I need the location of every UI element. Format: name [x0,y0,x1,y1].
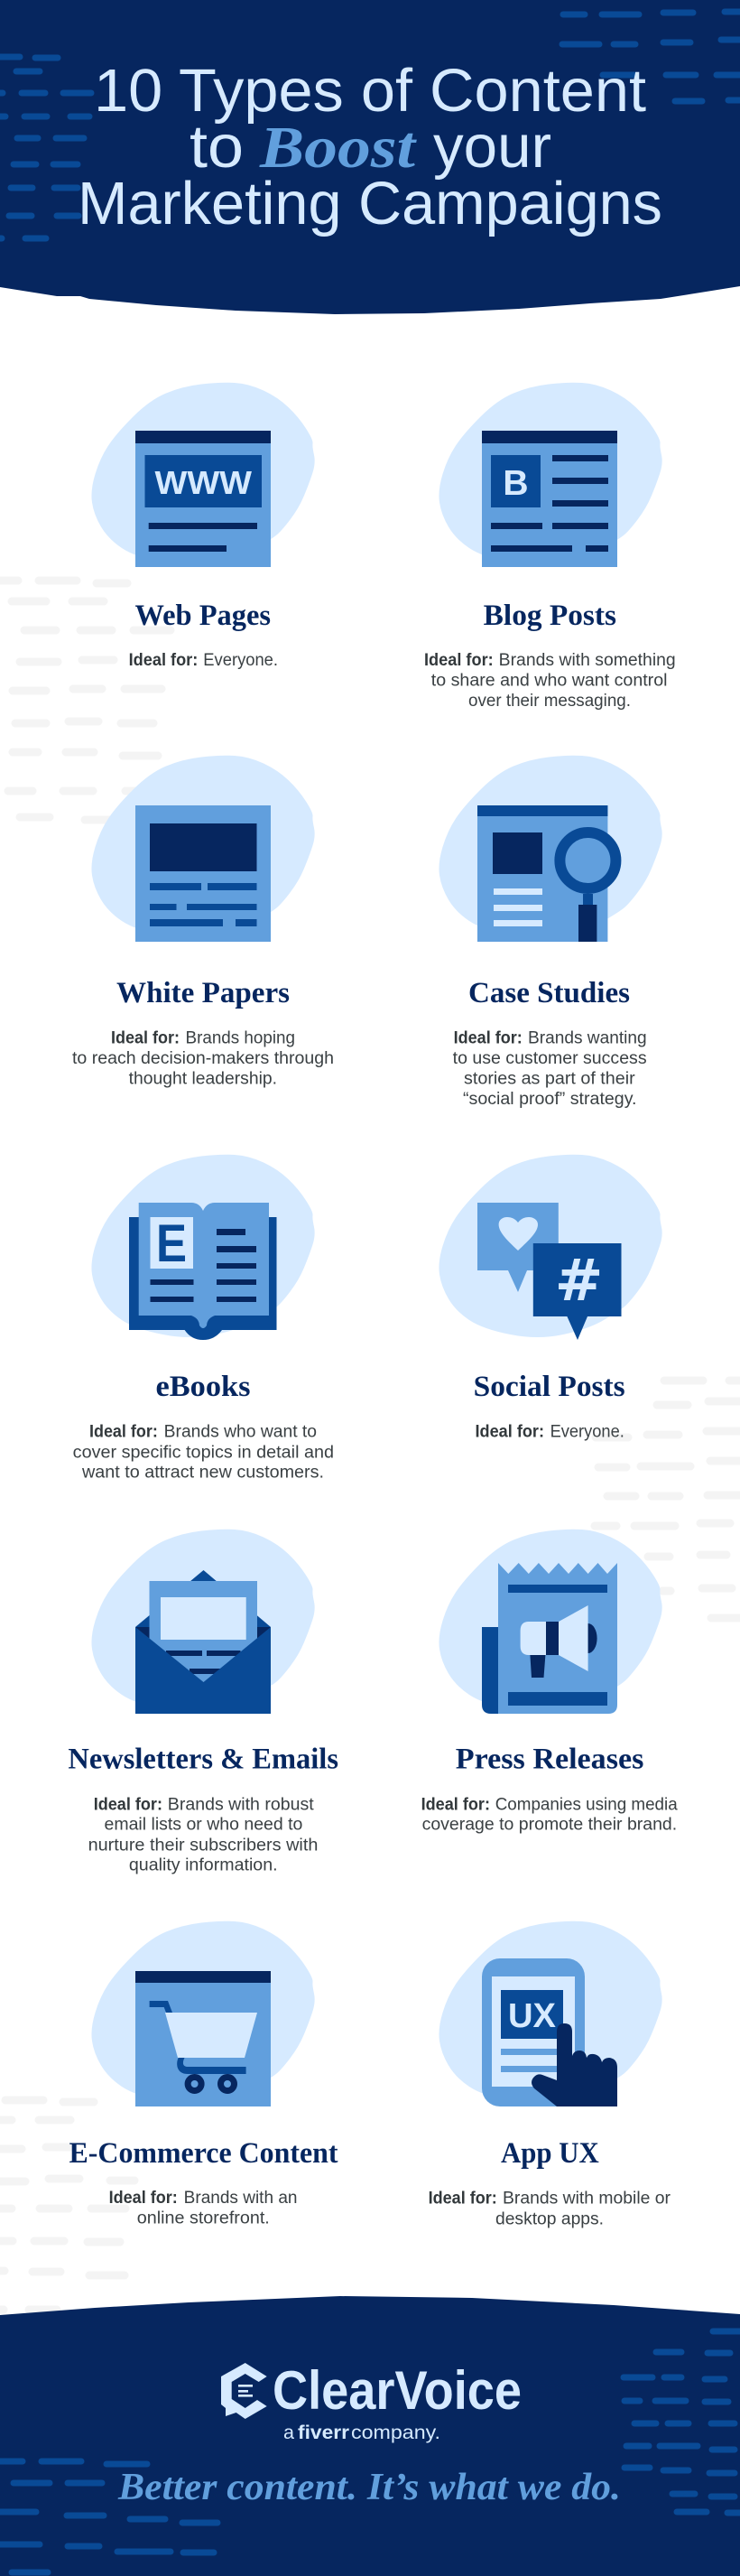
title: Boost [259,115,417,181]
heading: Web Pages [135,600,271,632]
icon: phone with pointing hand [482,1958,617,2106]
blob [91,1921,315,2104]
panel: blog posts [424,383,676,711]
icon: shopping cart [135,1971,271,2106]
title: 10 Types of Content [94,57,646,125]
icon: open book [129,1203,276,1340]
heading: E-Commerce Content [69,2137,338,2170]
description [453,1029,647,1109]
description: coverage to promote their brand. [422,1816,677,1835]
title: your [433,113,551,181]
blob [439,383,662,565]
description: want to attract new customers. [81,1464,324,1483]
description: Ideal for: [454,1029,523,1048]
tagline: Better content. It’s what we do. [117,2467,621,2508]
description: Ideal for: [421,1795,490,1814]
blob [439,756,662,938]
blob [91,756,315,938]
icon: magnifier over document [477,805,615,942]
description [73,1423,334,1483]
icon: press release with megaphone [482,1563,617,1714]
icon: ClearVoice logo mark [221,2363,267,2419]
heading: Case Studies [468,977,630,1009]
heading: Press Releases [456,1744,644,1776]
description: to reach decision-makers through [72,1049,334,1068]
icon: web page [135,431,271,567]
description: Ideal for: [424,651,494,670]
description: online storefront. [137,2209,270,2228]
panel: newsletters and emails [68,1530,338,1875]
description: Ideal for: [129,651,198,670]
description: “social proof” strategy. [463,1090,637,1109]
description: Brands with something [499,651,676,670]
description: Ideal for: [94,1795,162,1814]
title: to [190,113,244,181]
icon: blog post [482,431,617,567]
icon: phone with pointing hand: UX [508,1997,557,2035]
description: over their messaging. [468,692,631,711]
icon: open book: E [156,1214,187,1273]
description: Ideal for: [109,2189,178,2208]
description [429,2190,671,2228]
description: email lists or who need to [105,1816,302,1835]
description: Brands hoping [186,1029,295,1048]
icon: speech bubbles [477,1203,621,1340]
description: to use customer success [453,1049,647,1068]
description [72,1029,334,1089]
logo subline: fiverr [298,2423,349,2443]
description: Ideal for: [111,1029,180,1048]
description: cover specific topics in detail and [73,1443,334,1462]
panel: press releases [421,1530,678,1835]
panel: case studies [439,756,662,1109]
heading: White Papers [116,977,290,1009]
panel: ebooks [73,1155,334,1483]
description: Brands with an [184,2189,298,2208]
title [78,57,662,237]
heading: Social Posts [474,1371,625,1403]
logo subline: a [283,2423,294,2443]
description: Companies using media [495,1795,678,1814]
panel: app ux [429,1921,671,2228]
title: Marketing Campaigns [78,170,662,237]
icon: speech bubbles: # [555,1248,603,1315]
description: Brands who want to [164,1423,317,1442]
description: desktop apps. [495,2209,604,2228]
blob [91,1530,315,1712]
logo subline: company. [351,2423,440,2443]
panel: web pages [91,383,315,670]
description [421,1795,678,1835]
panel: social posts [439,1155,662,1442]
panel: e-commerce content [69,1921,338,2228]
description [109,2189,297,2228]
blob [91,1155,315,1337]
heading: App UX [501,2137,599,2170]
description: quality information. [129,1856,278,1875]
header band [0,0,740,314]
logo wordmark: ClearVoice [273,2360,522,2421]
description: Ideal for: [429,2190,497,2209]
description: stories as part of their [464,1070,635,1089]
panel: white papers [72,756,334,1089]
description: Brands with robust [168,1795,314,1814]
description: nurture their subscribers with [88,1836,318,1855]
description [424,651,676,711]
blob [439,1921,662,2104]
heading: Newsletters & Emails [68,1744,338,1776]
description [88,1795,318,1875]
icon: open envelope [135,1570,271,1714]
description: Brands with mobile or [503,2190,671,2209]
description: Everyone. [550,1423,624,1442]
icon: blog post: B [503,464,529,503]
description: Ideal for: [475,1423,544,1442]
heading: eBooks [155,1371,251,1403]
heading: Blog Posts [484,600,616,632]
description: Ideal for: [89,1423,158,1442]
footer band [0,2296,740,2576]
blob [91,383,315,565]
icon: web page: WWW [155,464,252,501]
blob [439,1155,662,1337]
description: thought leadership. [129,1070,277,1089]
description: to share and who want control [431,672,668,690]
icon: white paper [135,805,271,942]
description: Brands wanting [528,1029,647,1048]
blob [439,1530,662,1712]
description: Everyone. [203,651,278,670]
